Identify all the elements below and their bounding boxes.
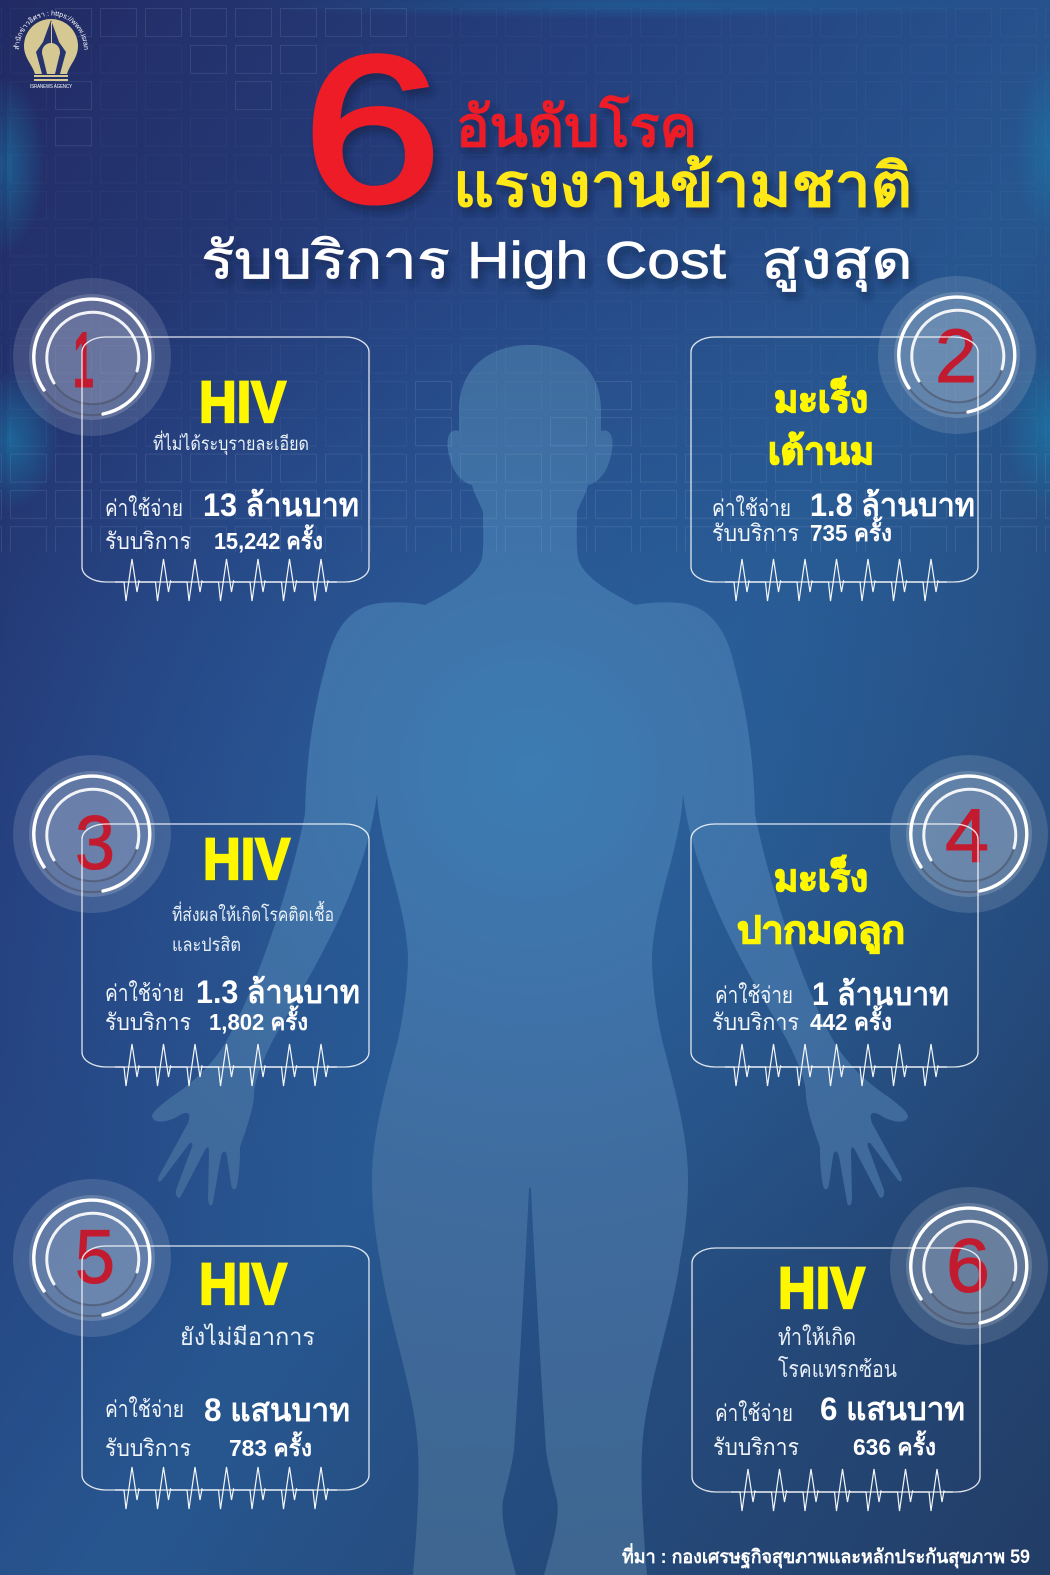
cost value: 1.8 ล้านบาท [810,487,975,523]
service label: รับบริการ [712,520,799,546]
title line 2: แรงงานข้ามชาติ [453,152,912,219]
service count: 783 ครั้ง [229,1431,312,1461]
number 6: 6 [946,1224,990,1309]
title line 3: รับบริการ [201,232,450,290]
ECG line [725,559,947,601]
heading line 1: มะเร็ง [774,376,868,421]
panel: rank 4 cervical cancer [691,755,1048,1086]
title line 3: High Cost [467,232,727,290]
service label: รับบริการ [105,1435,191,1461]
service count: 1,802 ครั้ง [209,1005,308,1035]
heading line 1: มะเร็ง [774,855,868,900]
heading HIV: HIV [203,827,290,892]
badge 1 [13,278,171,436]
card outline 4 [691,824,978,1067]
panel: rank 6 HIV complications [692,1187,1048,1511]
panel: rank 5 HIV asymptomatic [13,1179,369,1509]
description: ที่ไม่ได้ระบุรายละเอียด [153,430,309,456]
description line 1: ทำให้เกิด [778,1324,856,1350]
service count: 636 ครั้ง [853,1430,936,1460]
cost label: ค่าใช้จ่าย [712,495,791,521]
card outline 6 [692,1248,980,1492]
background grid [0,8,1050,552]
ECG line [731,1469,953,1511]
cost value: 6 แสนบาท [820,1391,965,1427]
cost label: ค่าใช้จ่าย [715,1400,793,1426]
badge 5 [13,1179,171,1337]
ECG line [725,1044,947,1086]
ECG line [115,1467,337,1509]
heading HIV: HIV [199,370,286,435]
service count: 735 ครั้ง [810,516,892,546]
service label: รับบริการ [712,1009,799,1035]
ECG line [115,559,337,601]
description line 2: และปรสิต [172,935,241,956]
title number 6: 6 [303,14,441,246]
source note: ที่มา : กองเศรษฐกิจสุขภาพและหลักประกันสุขภาพ 59 [622,1543,1030,1570]
panel: rank 1 HIV unspecified: 1 [73,318,94,403]
heading HIV: HIV [199,1252,287,1317]
cost label: ค่าใช้จ่าย [715,982,793,1008]
body silhouette [152,345,908,1575]
badge 3 [13,755,171,913]
description: ยังไม่มีอาการ [180,1323,315,1351]
number 4: 4 [945,794,989,879]
service count: 442 ครั้ง [810,1005,892,1035]
number 3: 3 [75,801,115,886]
badge 6 [890,1187,1048,1345]
heading HIV: HIV [778,1256,865,1321]
cost label: ค่าใช้จ่าย [105,495,183,521]
cost label: ค่าใช้จ่าย [105,980,184,1006]
card outline 5 [82,1246,369,1490]
badge 4 [890,755,1048,913]
service label: รับบริการ [105,1009,191,1035]
panel: rank 3 HIV with infections [13,755,369,1086]
cost value: 8 แสนบาท [204,1392,350,1428]
cost value: 1 ล้านบาท [812,976,949,1012]
service count: 15,242 ครั้ง [214,524,323,554]
panel: rank 2 breast cancer [691,276,1036,601]
badge 2 [878,276,1036,434]
ECG line [115,1044,337,1086]
card outline 1 [82,337,369,582]
title [201,14,913,292]
title line 3: สูงสุด [761,232,913,292]
description line 1: ที่ส่งผลให้เกิดโรคติดเชื้อ [172,901,334,926]
title line 3 [201,232,913,292]
cost value: 13 ล้านบาท [203,487,359,523]
logo [14,10,88,90]
logo: ISRANEWS AGENCY [30,84,73,90]
title line 1: อันดับโรค [456,94,697,158]
number 2: 2 [935,314,977,399]
heading line 2: ปากมดลูก [737,910,905,954]
panel: rank 1 HIV unspecified [13,278,369,601]
cost value: 1.3 ล้านบาท [196,974,360,1010]
description line 2: โรคแทรกซ้อน [778,1356,897,1382]
card outline 3 [82,824,369,1067]
number 5: 5 [75,1215,115,1300]
card outline 2 [691,337,978,582]
service label: รับบริการ [713,1434,799,1460]
cost label: ค่าใช้จ่าย [105,1396,184,1422]
service label: รับบริการ [105,528,191,554]
heading line 2: เต้านม [768,431,874,473]
